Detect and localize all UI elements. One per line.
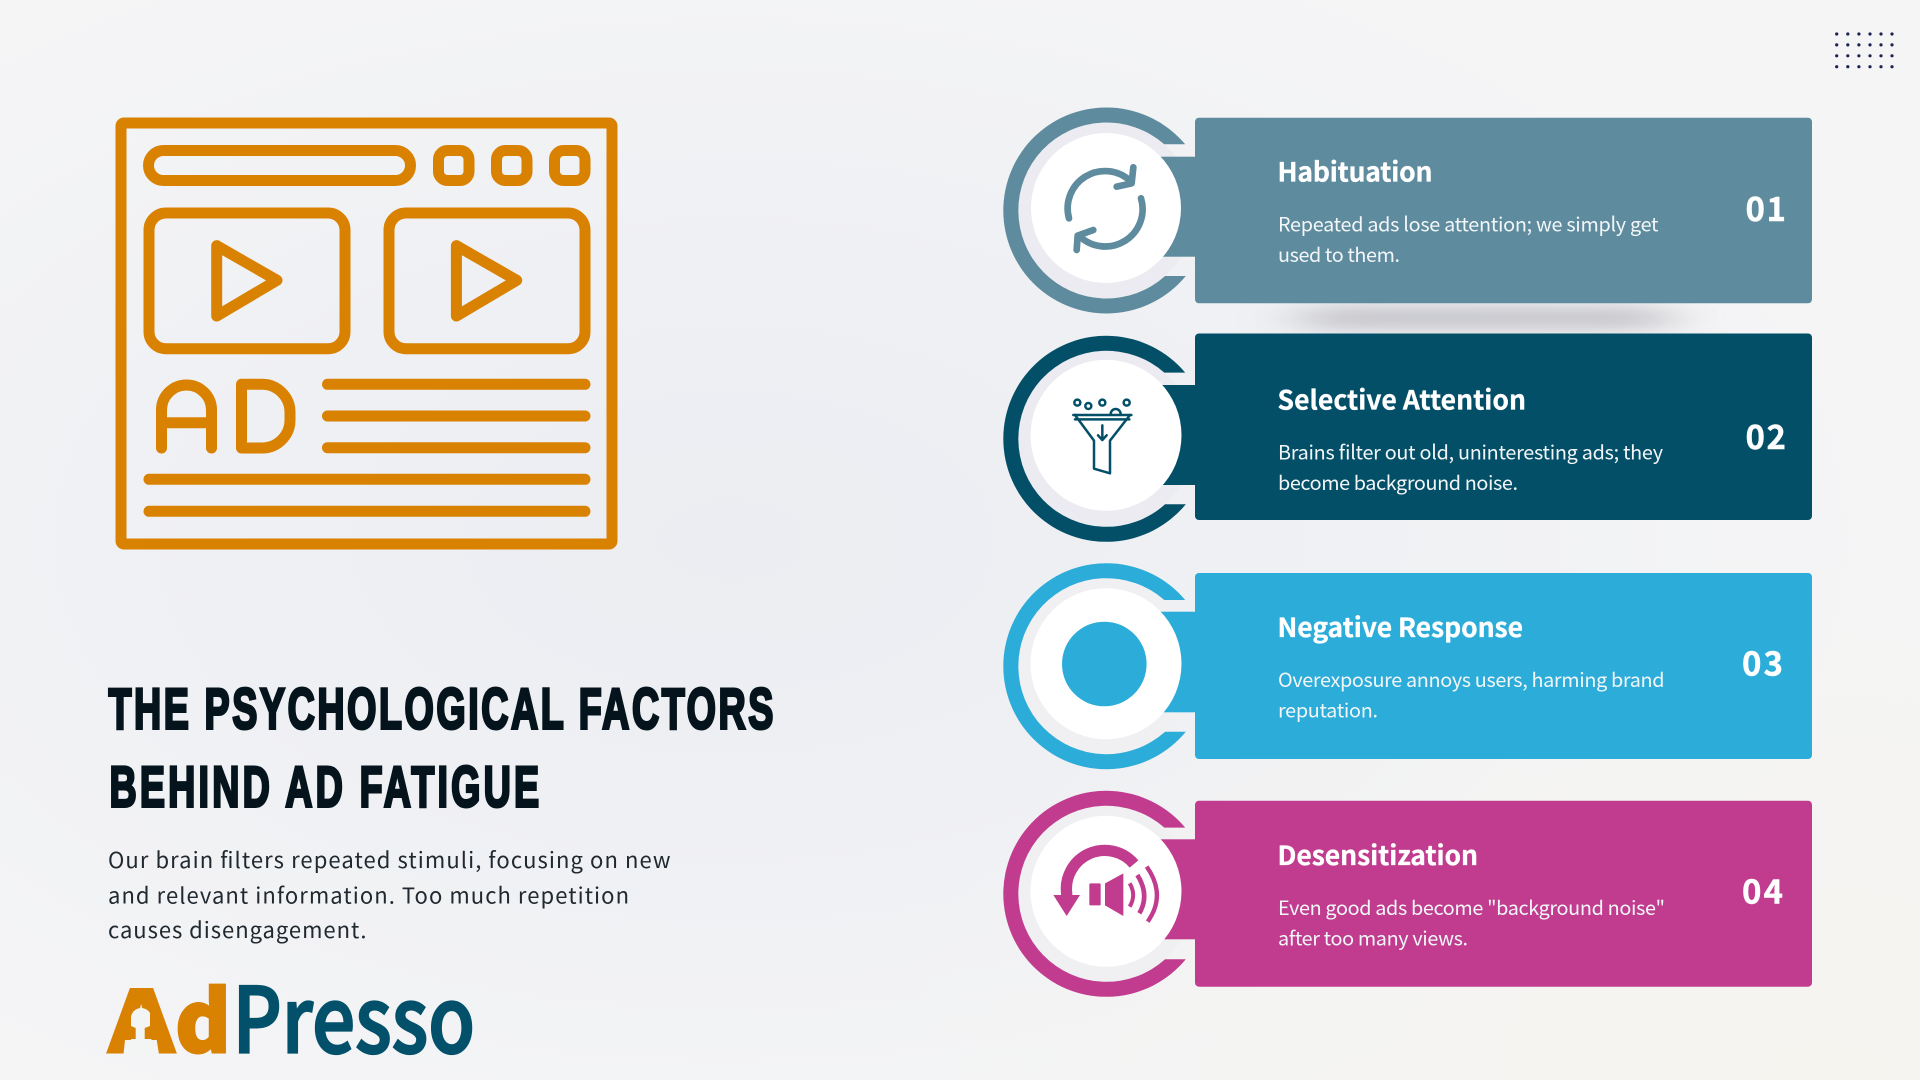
description [1278, 436, 1664, 496]
card 01 background [1195, 118, 1812, 303]
card shadow [1300, 306, 1670, 330]
logo: AdPresso: Presso [232, 948, 475, 1078]
intro paragraph [108, 843, 671, 945]
icon: refresh arrows [1068, 167, 1143, 250]
description: Overexposure annoys users, harming brand [1278, 664, 1664, 693]
description: become background noise. [1278, 467, 1518, 496]
description: after too many views. [1278, 922, 1468, 951]
description: Even good ads become "background noise" [1278, 892, 1665, 921]
badge 03 ring [1003, 563, 1196, 769]
title: THE PSYCHOLOGICAL FACTORS [108, 678, 773, 742]
description [1278, 209, 1659, 268]
heading: Selective Attention [1278, 378, 1526, 418]
heading: Habituation [1278, 151, 1432, 190]
icon: solid circle [1062, 622, 1147, 706]
icon: speaker with return arrow [1053, 850, 1157, 922]
card 03 background [1195, 573, 1812, 759]
logo: AdPresso: A [107, 954, 176, 1078]
description: reputation. [1278, 695, 1378, 724]
icon: filter funnel [1073, 400, 1131, 473]
badge 04 ring [1003, 791, 1196, 997]
description: Repeated ads lose attention; we simply get [1278, 209, 1659, 238]
intro paragraph: Our brain filters repeated stimuli, focusing on new [108, 843, 671, 875]
logo: AdPresso [107, 948, 475, 1078]
intro paragraph: causes disengagement. [108, 913, 366, 945]
description: Brains filter out old, uninteresting ads; they [1278, 436, 1664, 466]
heading: Negative Response [1278, 606, 1523, 645]
number: 01 [1746, 183, 1786, 231]
panel: Habituation [1003, 108, 1812, 314]
badge 02 ring [1003, 336, 1196, 542]
decorative dot grid [1835, 32, 1894, 68]
icon: ad web page with video players [121, 123, 612, 544]
panel: Selective Attention [1003, 334, 1812, 542]
card 02 background [1195, 334, 1812, 520]
number: 04 [1742, 865, 1783, 913]
description [1278, 892, 1665, 951]
description: used to them. [1278, 239, 1400, 268]
panel: Negative Response [1003, 563, 1812, 769]
number: 02 [1746, 411, 1786, 459]
intro paragraph: and relevant information. Too much repetition [108, 878, 629, 910]
panel: Desensitization [1003, 791, 1812, 997]
badge 01 ring [1003, 108, 1196, 314]
number: 03 [1742, 638, 1783, 686]
title [108, 678, 773, 820]
title: BEHIND AD FATIGUE [110, 756, 539, 820]
heading: Desensitization [1278, 834, 1478, 873]
description [1278, 664, 1664, 724]
logo: AdPresso: d [175, 954, 231, 1078]
card 04 background [1195, 801, 1812, 987]
